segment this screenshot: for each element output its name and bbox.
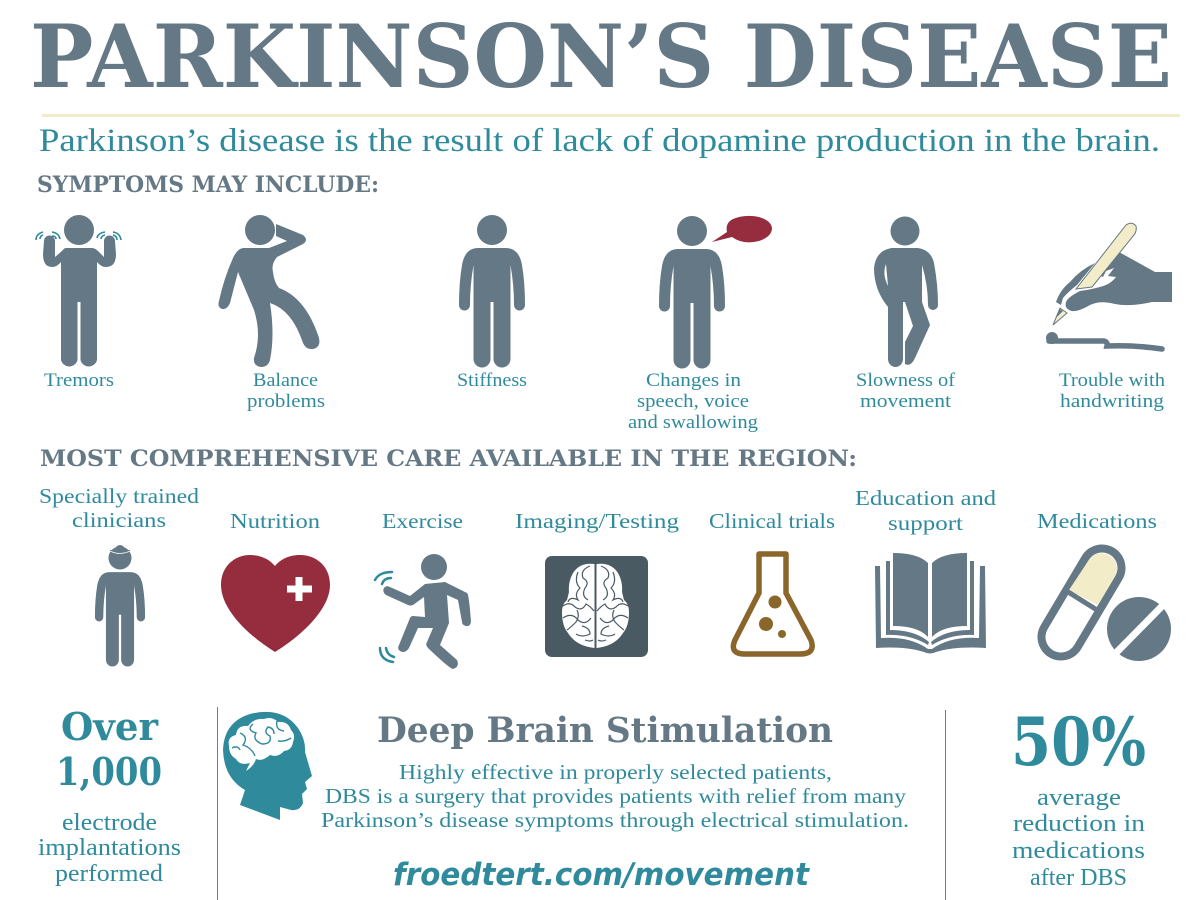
symptom: speech, voice and swallowing <box>628 216 772 433</box>
symptom: balance problems <box>218 215 325 412</box>
stat: medication reduction <box>1011 703 1146 891</box>
label: speech: and swallowing <box>628 412 759 433</box>
heading: symptoms: SYMPTOMS MAY INCLUDE: <box>37 172 379 198</box>
label: speech: speech, voice <box>637 391 749 412</box>
care: imaging <box>515 509 679 657</box>
text: DBS description: Highly effective in properly selected patients, <box>399 760 832 784</box>
stat: medication reduction: 50% <box>1011 703 1146 781</box>
stat: medication reduction: reduction in <box>1013 811 1145 837</box>
icon: hand writing <box>1046 223 1172 349</box>
text: DBS description: DBS is a surgery that provides patients with relief from many <box>325 784 906 808</box>
icon: head with brain <box>223 712 312 820</box>
text: DBS description: Parkinson’s disease symptoms through electrical stimulation. <box>321 808 909 832</box>
label: slowness: movement <box>860 391 952 412</box>
stat: electrode implantations: performed <box>55 861 163 887</box>
icon: tremors figure <box>43 215 116 366</box>
care: medications <box>1037 509 1171 661</box>
label: speech <box>628 370 759 433</box>
label: exercise: Exercise <box>382 509 463 533</box>
label: handwriting <box>1059 370 1166 412</box>
heading: care: MOST COMPREHENSIVE CARE AVAILABLE IN THE REGION: <box>40 446 857 472</box>
text: DBS description <box>321 760 909 832</box>
symptom: tremors <box>36 215 121 391</box>
title: PARKINSON’S DISEASE <box>30 5 1172 108</box>
icon: speaking figure <box>659 216 725 368</box>
icon: balance figure <box>218 215 319 367</box>
symptom: stiffness <box>457 215 527 391</box>
label: handwriting: Trouble with <box>1059 370 1166 391</box>
care: exercise <box>375 509 471 669</box>
stat: electrode implantations: Over <box>61 704 159 749</box>
stat: medication reduction: medications <box>1012 838 1145 864</box>
subtitle: Parkinson’s disease is the result of lack of dopamine production in the brain. <box>39 123 1160 159</box>
icon: exercising figure <box>375 554 471 669</box>
label: education <box>855 486 996 535</box>
symptom: slowness <box>856 216 956 412</box>
label: speech: Changes in <box>646 370 742 391</box>
care: clinicians <box>39 484 199 666</box>
icon: slowness figure <box>874 216 938 367</box>
stat: electrode implantations: electrode <box>62 810 157 836</box>
label: clinicians <box>39 484 199 532</box>
label: tremors: Tremors <box>44 370 114 391</box>
icon: clinician figure <box>95 545 145 666</box>
symptom: handwriting <box>1046 223 1172 412</box>
stat: electrode implantations: 1,000 <box>56 749 162 794</box>
icon: flask <box>733 554 812 654</box>
label: imaging: Imaging/Testing <box>515 509 679 533</box>
label: clinical trials: Clinical trials <box>709 509 835 533</box>
icon: brain scan <box>545 556 648 657</box>
label: stiffness: Stiffness <box>457 370 527 391</box>
label: clinicians: Specially trained <box>39 484 199 508</box>
label: slowness <box>856 370 956 412</box>
icon: stiffness figure <box>459 215 525 367</box>
label: balance problems: Balance <box>253 370 318 391</box>
label: medications: Medications <box>1037 509 1157 533</box>
care: nutrition <box>221 509 330 652</box>
heading: deep brain stimulation: Deep Brain Stimulation <box>377 710 833 751</box>
label: nutrition: Nutrition <box>230 509 320 533</box>
stat: medication reduction: average <box>1037 785 1121 811</box>
stat: electrode implantations <box>38 704 181 887</box>
icon: open book <box>875 553 986 654</box>
care: clinical trials <box>709 509 835 654</box>
stat: electrode implantations: implantations <box>38 835 181 861</box>
label: education: Education and <box>855 486 996 510</box>
label: balance problems <box>247 370 325 412</box>
icon: heart with cross <box>221 555 330 652</box>
care: education <box>855 486 996 654</box>
icon: speech bubble <box>712 216 772 242</box>
url: froedtert.com/movement <box>393 857 810 893</box>
icon: capsule and tablet <box>1061 553 1171 661</box>
label: education: support <box>888 511 963 535</box>
label: balance problems: problems <box>247 391 325 412</box>
stat: medication reduction: after DBS <box>1030 865 1127 891</box>
label: slowness: Slowness of <box>856 370 956 391</box>
label: clinicians: clinicians <box>72 508 166 532</box>
label: handwriting: handwriting <box>1060 391 1165 412</box>
